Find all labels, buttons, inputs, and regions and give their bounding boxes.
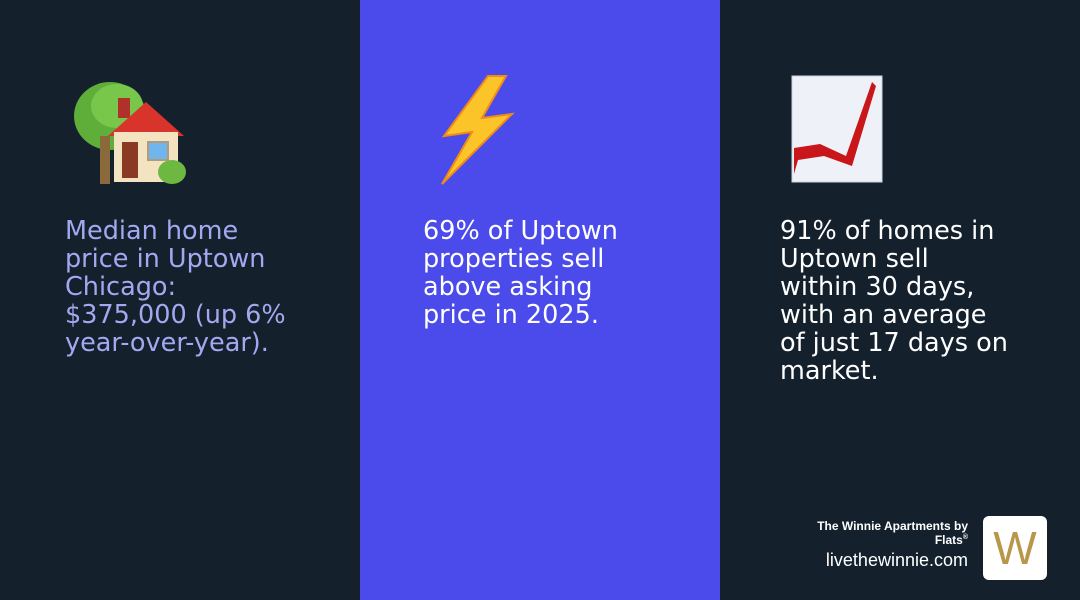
text: above asking: price in 2025. — [423, 300, 599, 330]
text: median price: year-over-year). — [65, 328, 269, 358]
logo — [983, 516, 1047, 580]
panel: median price — [0, 0, 360, 600]
brand name — [817, 519, 968, 547]
website: livethewinnie.com — [826, 550, 968, 570]
text: median price: Chicago: — [65, 272, 176, 302]
text: median price: price in Uptown — [65, 244, 265, 274]
text: median price — [65, 216, 286, 358]
text: days on market — [780, 216, 1008, 386]
text: median price: Median home — [65, 216, 238, 246]
text: days on market: within 30 days, — [780, 272, 974, 302]
icon: lightning — [441, 75, 515, 185]
text: above asking — [423, 216, 618, 330]
text: median price: $375,000 (up 6% — [65, 300, 286, 330]
text: days on market: with an average — [780, 300, 986, 330]
brand name: The Winnie Apartments by — [817, 519, 968, 533]
text: days on market: of just 17 days on — [780, 328, 1008, 358]
text: above asking: 69% of Uptown — [423, 216, 618, 246]
logo: W — [993, 522, 1037, 574]
icon: chart — [792, 76, 882, 182]
text: days on market: 91% of homes in — [780, 216, 994, 246]
brand name: Flats® — [935, 533, 968, 547]
icon: house with tree — [74, 82, 186, 184]
text: above asking: above asking — [423, 272, 592, 302]
text: days on market: Uptown sell — [780, 244, 929, 274]
footer brand — [817, 516, 1047, 580]
text: above asking: properties sell — [423, 244, 604, 274]
text: days on market: market. — [780, 356, 879, 386]
panel: above asking — [360, 0, 720, 600]
panel: days on market — [720, 0, 1080, 600]
